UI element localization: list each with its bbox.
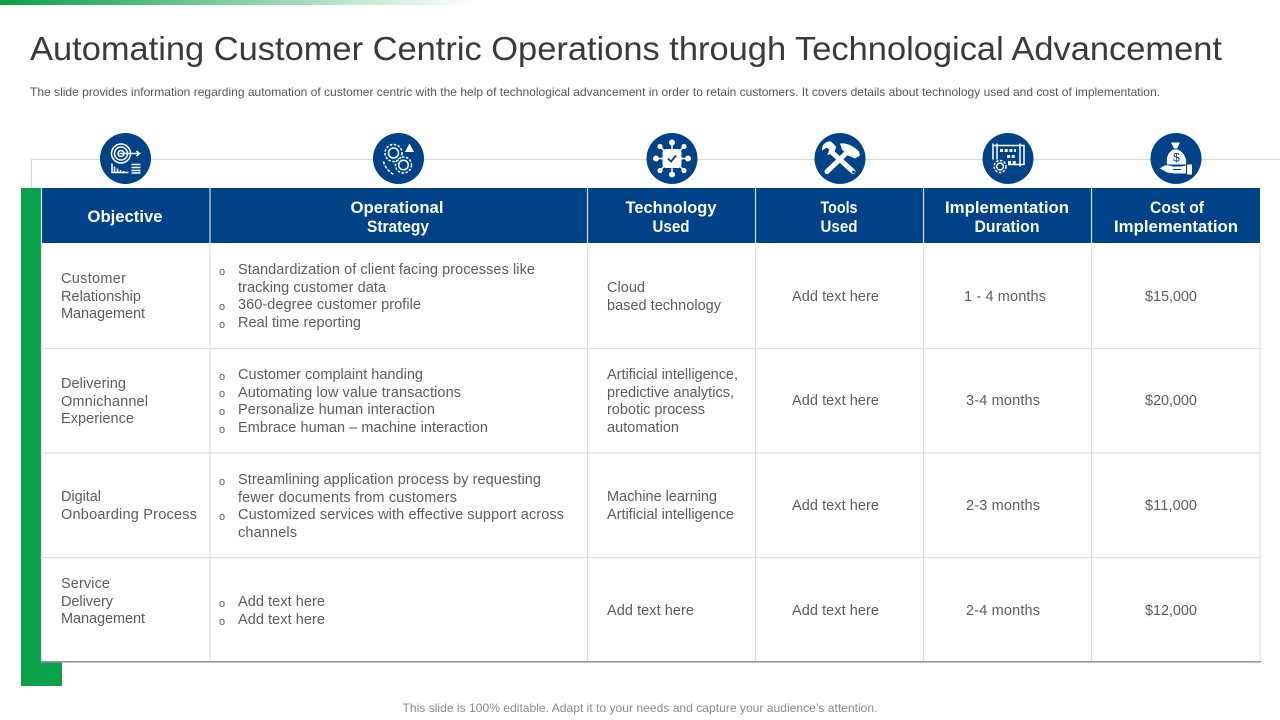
row 1: Customer bbox=[61, 271, 126, 287]
row 2: o bbox=[219, 388, 225, 400]
row 1: based technology bbox=[607, 298, 722, 314]
row 4: o bbox=[219, 616, 225, 628]
row 1: tracking customer data bbox=[238, 280, 387, 296]
header labels: Operational bbox=[350, 199, 444, 217]
row 2: $20,000 bbox=[1145, 393, 1197, 409]
icon: wrench and hammer bbox=[814, 133, 866, 184]
header labels: Technology bbox=[626, 199, 717, 217]
row 1: 360-degree customer profile bbox=[238, 297, 421, 313]
header labels: Duration bbox=[974, 218, 1040, 236]
row 3: Artificial intelligence bbox=[607, 507, 734, 523]
row 1: Standardization of client facing processes like bbox=[238, 262, 535, 278]
row 3: o bbox=[219, 511, 225, 523]
row 3 bbox=[61, 472, 1197, 541]
table bottom rule bbox=[41, 661, 1261, 663]
header labels: Used bbox=[820, 218, 858, 236]
row 4: 2-4 months bbox=[966, 603, 1040, 619]
row 2: o bbox=[219, 406, 225, 418]
row 2: Delivering bbox=[61, 376, 126, 392]
row 4: Add text here bbox=[607, 603, 694, 619]
row 2: Experience bbox=[61, 411, 134, 427]
row 1: $15,000 bbox=[1145, 289, 1197, 305]
row 4: Management bbox=[61, 611, 145, 627]
row 2: o bbox=[219, 371, 225, 383]
row 3: channels bbox=[238, 525, 297, 541]
row 1: Relationship bbox=[61, 289, 141, 305]
row 2: Artificial intelligence, bbox=[607, 367, 738, 383]
header labels: Strategy bbox=[367, 218, 430, 236]
footer note: This slide is 100% editable. Adapt it to your needs and capture your audience’s attention. bbox=[402, 701, 878, 715]
row 3: Customized services with effective support across bbox=[238, 507, 564, 523]
header labels: Objective bbox=[88, 208, 162, 226]
row 1: Management bbox=[61, 306, 145, 322]
header band bbox=[41, 188, 1260, 243]
row 3: Machine learning bbox=[607, 489, 717, 505]
icon: target and chart bbox=[100, 133, 151, 184]
header labels: Tools bbox=[820, 199, 858, 217]
grid lines bbox=[41, 188, 1260, 662]
green accent bracket bbox=[21, 188, 62, 686]
row 2: 3-4 months bbox=[966, 393, 1040, 409]
row 2: Customer complaint handing bbox=[238, 367, 423, 383]
row 3: fewer documents from customers bbox=[238, 490, 457, 506]
row 4: Service bbox=[61, 576, 110, 592]
row 4: o bbox=[219, 598, 225, 610]
header labels: Used bbox=[652, 218, 690, 236]
icon: people gears bbox=[373, 133, 424, 184]
row 3: 2-3 months bbox=[966, 498, 1040, 514]
header labels bbox=[88, 199, 1238, 236]
row 1: o bbox=[219, 266, 225, 278]
row 1 bbox=[61, 262, 1197, 331]
row 2 bbox=[61, 367, 1197, 436]
row 3: Streamlining application process by requesting bbox=[238, 472, 541, 488]
row 2: o bbox=[219, 424, 225, 436]
row 1: 1 - 4 months bbox=[964, 289, 1046, 305]
icon: technology network bbox=[646, 133, 698, 184]
icon: blueprint and gear bbox=[982, 133, 1034, 184]
row 2: Automating low value transactions bbox=[238, 385, 461, 401]
row 2: automation bbox=[607, 420, 679, 436]
row 4 bbox=[61, 576, 1197, 628]
row 4: Add text here bbox=[238, 594, 325, 610]
table bbox=[41, 188, 1261, 663]
row 2: Personalize human interaction bbox=[238, 402, 435, 418]
subtitle: The slide provides information regarding automation of customer centric with the help of technological advancement in order to retain customers. It covers details about technology used and cost of implementation. bbox=[30, 85, 1160, 99]
row 3: Digital bbox=[61, 489, 101, 505]
row 4: Add text here bbox=[792, 603, 879, 619]
row 2: robotic process bbox=[607, 402, 705, 418]
row 3: Add text here bbox=[792, 498, 879, 514]
connector frame line bbox=[32, 160, 1280, 188]
title: Automating Customer Centric Operations through Technological Advancement bbox=[30, 30, 1222, 67]
row 2: Embrace human – machine interaction bbox=[238, 420, 488, 436]
row 1: o bbox=[219, 319, 225, 331]
row 1: Cloud bbox=[607, 280, 645, 296]
row 3: $11,000 bbox=[1145, 498, 1197, 514]
row 4: Add text here bbox=[238, 612, 325, 628]
header labels: Implementation bbox=[945, 199, 1069, 217]
row 2: Omnichannel bbox=[61, 394, 148, 410]
table body bbox=[41, 243, 1260, 662]
row 3: o bbox=[219, 476, 225, 488]
row 2: Add text here bbox=[792, 393, 879, 409]
header labels: Implementation bbox=[1114, 218, 1238, 236]
row 1: Real time reporting bbox=[238, 315, 361, 331]
row 1: o bbox=[219, 301, 225, 313]
icon: money bag in hand bbox=[1150, 133, 1202, 184]
row 3: Onboarding Process bbox=[61, 507, 197, 523]
row 4: $12,000 bbox=[1145, 603, 1197, 619]
row 2: predictive analytics, bbox=[607, 385, 734, 401]
icon: money bag in hand: $ bbox=[1173, 150, 1180, 164]
top gradient bar bbox=[0, 0, 475, 5]
row 1: Add text here bbox=[792, 289, 879, 305]
header labels: Cost of bbox=[1150, 199, 1204, 217]
row 4: Delivery bbox=[61, 594, 114, 610]
